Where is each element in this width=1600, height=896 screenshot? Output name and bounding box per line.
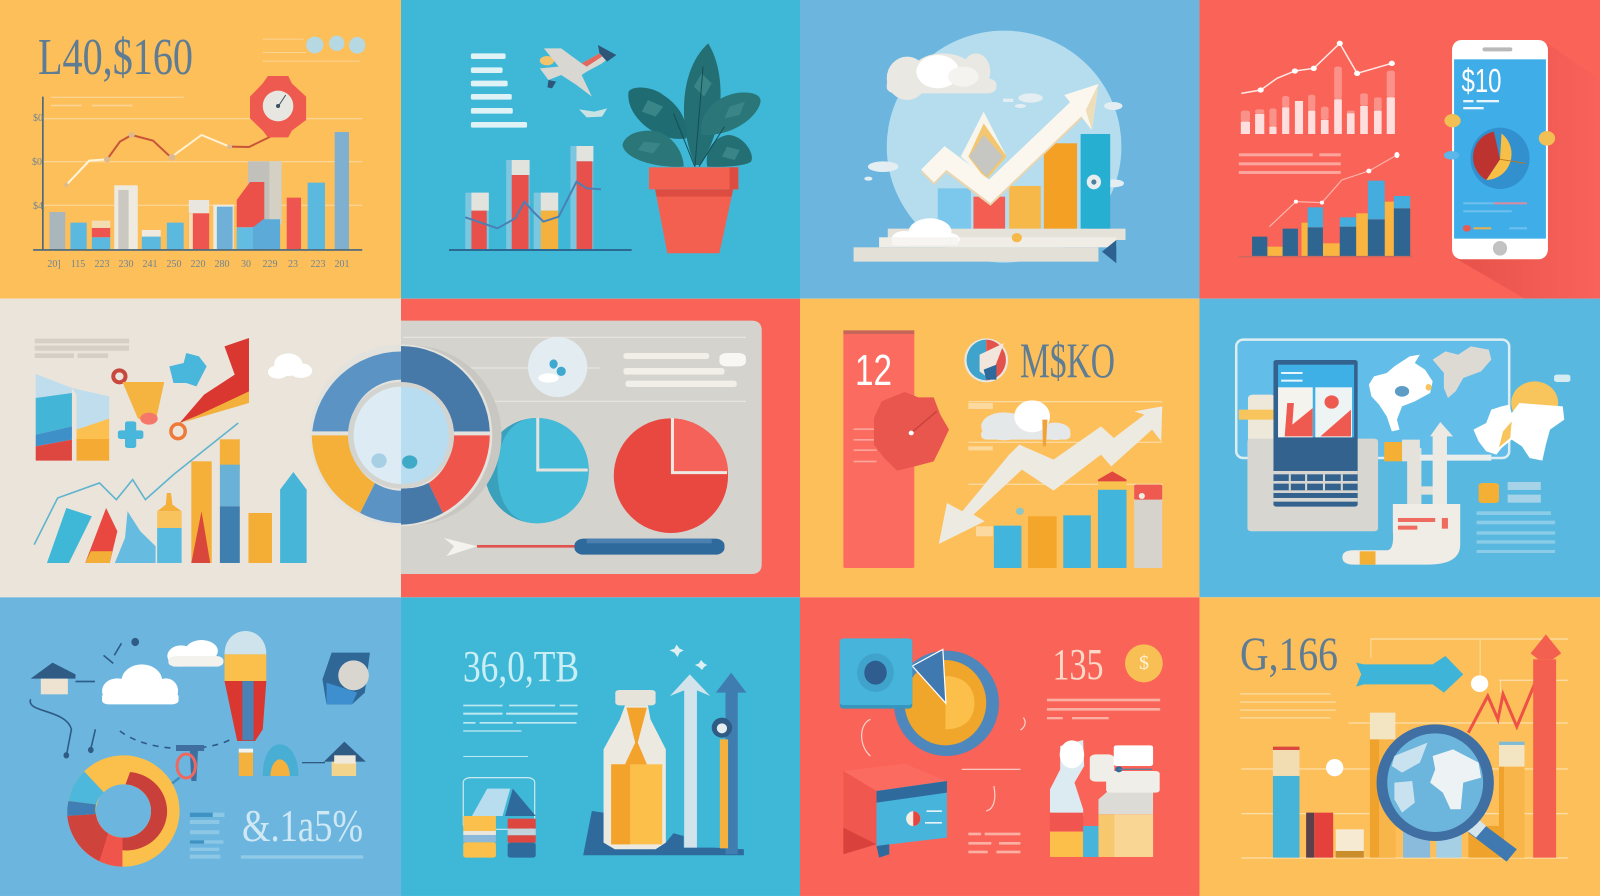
- pie chart: teal: [485, 418, 589, 523]
- white arrow: [928, 84, 1098, 194]
- heading: L40,$160: [38, 29, 193, 86]
- bottom bar chart: [1239, 152, 1412, 257]
- icon: stars: [669, 645, 707, 670]
- red arrow: [1531, 634, 1561, 858]
- text lines: [1239, 153, 1341, 174]
- line chart: [64, 132, 270, 187]
- axis labels: 220: [191, 259, 205, 270]
- axis labels: 115: [71, 259, 85, 270]
- icon: pink magnifier: [158, 745, 204, 794]
- panel: light blue icon set: [0, 597, 401, 896]
- axis labels: 250: [167, 259, 181, 270]
- panel: yellow magnifier and chart: [1199, 597, 1600, 896]
- bar chart: [49, 132, 349, 249]
- panel: blue rising arrow scene: [800, 0, 1199, 299]
- icon: 3D card: [843, 764, 947, 858]
- icon: coin: [1125, 644, 1163, 682]
- icon: small globes: [306, 36, 365, 54]
- icon: right bottle: [1090, 745, 1160, 857]
- icon: house with glasses: [302, 742, 366, 776]
- grid lines: [1241, 638, 1568, 859]
- bar chart: [1273, 713, 1524, 858]
- axis labels: 229: [263, 259, 277, 270]
- red zigzag line: [1468, 678, 1537, 733]
- pie chart: [1470, 128, 1530, 189]
- axis labels: $0: [32, 157, 42, 168]
- grid lines: [968, 401, 1162, 536]
- bar chart with line: [449, 146, 632, 250]
- axis labels: 223: [95, 259, 109, 270]
- list bars: [471, 53, 527, 128]
- axis labels: $0: [33, 113, 43, 124]
- axis labels: 230: [119, 259, 133, 270]
- legend and text lines: [1477, 375, 1570, 553]
- icon: cans in frame: [463, 778, 536, 858]
- text lines: [1240, 693, 1336, 719]
- axis labels: 30: [241, 259, 251, 270]
- icon: lens bubble: [528, 337, 587, 397]
- axis labels: 201: [335, 259, 349, 270]
- decorative marks: [862, 718, 1025, 811]
- donut chart: [310, 344, 502, 526]
- pie chart: red: [614, 418, 728, 533]
- column number: 12: [855, 346, 892, 395]
- dashboard card: [401, 321, 762, 574]
- axis labels: 241: [143, 259, 157, 270]
- phone value: $10: [1461, 62, 1501, 99]
- icon: arch: [263, 744, 298, 776]
- paper roll: [1239, 395, 1276, 441]
- icon: red stopwatch: [250, 76, 306, 137]
- text lines: [35, 339, 129, 358]
- axis labels: 280: [215, 259, 229, 270]
- icon: red swoosh arrow: [171, 338, 249, 439]
- icon: cloud: [887, 53, 996, 100]
- bar chart: [1241, 67, 1395, 134]
- nodes: [1326, 675, 1488, 776]
- panel: yellow growth chart: [800, 299, 1199, 597]
- axis labels: 23: [288, 259, 298, 270]
- phone shadow: [1456, 43, 1600, 299]
- legend bars: [190, 813, 363, 859]
- bar chart: [994, 471, 1162, 568]
- shape chart: [47, 439, 307, 563]
- icon: potted plant: [622, 43, 761, 253]
- axis labels: [32, 113, 349, 270]
- panel: teal plant and plane: [401, 0, 800, 299]
- icon: cloud: [981, 400, 1070, 446]
- bar chart: [938, 134, 1110, 229]
- trend line: [34, 423, 238, 545]
- text bars: [623, 353, 746, 387]
- white zigzag arrow: [939, 406, 1162, 544]
- axis labels: 223: [311, 259, 325, 270]
- axes: [33, 97, 362, 250]
- backdrop circle: [887, 31, 1121, 263]
- panel: yellow bar and line chart: [0, 0, 401, 299]
- arrows: [670, 673, 746, 854]
- icon: cloud: [268, 353, 312, 379]
- panel: red phone and charts: [1199, 0, 1600, 299]
- value: 135: [1052, 640, 1103, 689]
- base block: [583, 811, 744, 855]
- icon: house peak: [961, 112, 1007, 180]
- icon: teal square: [840, 638, 912, 709]
- icon: smartphone: [1444, 40, 1555, 259]
- icon: magnifier with globe: [1377, 724, 1517, 862]
- heading: M$KO: [1020, 332, 1115, 388]
- panel: red with grey dashboard: [401, 299, 800, 597]
- icon: clouds: [102, 640, 223, 704]
- sidebar column: [843, 330, 914, 568]
- panel: teal bottle and arrows: [401, 597, 800, 896]
- pie chart: [894, 649, 999, 756]
- monitor frame: [1236, 340, 1509, 458]
- icon: camera block: [322, 653, 370, 704]
- icon: round emblem: [964, 338, 1008, 382]
- stacked columns: [36, 374, 109, 461]
- platform steps: [854, 229, 1126, 263]
- blue arrow: [1356, 656, 1463, 693]
- small clouds: [864, 93, 1124, 187]
- foreground cloud: [892, 218, 960, 246]
- donut chart: [67, 755, 180, 867]
- icon: small house: [31, 663, 95, 694]
- text lines: [968, 699, 1160, 853]
- heading: G,166: [1240, 628, 1338, 681]
- icon: plane: [540, 45, 616, 117]
- icon: puzzle and plus: [118, 353, 207, 448]
- heading: 36,0,TB: [463, 642, 579, 691]
- icon: bottle: [604, 690, 666, 849]
- icon: red badge: [874, 392, 949, 471]
- pipe and arrow: [1342, 422, 1491, 565]
- text lines: [463, 705, 578, 757]
- icon: left bottle: [1050, 740, 1098, 857]
- dashes and path marks: [30, 639, 230, 758]
- axis labels: 20]: [47, 259, 61, 270]
- panel: beige charts and shapes: [0, 299, 401, 597]
- panel: blue device and world map: [1199, 299, 1600, 597]
- coin symbol: $: [1139, 652, 1149, 674]
- panel: red pie and card: [800, 597, 1199, 896]
- icon: funnel pin: [113, 370, 164, 425]
- device on box: [1247, 360, 1378, 531]
- axis labels: $4: [33, 201, 43, 212]
- line chart: [1241, 41, 1395, 93]
- icon: balloon rocket: [224, 631, 266, 776]
- world map: [1369, 346, 1564, 461]
- arrow and progress bar: [444, 538, 724, 556]
- percentage value: &.1a5%: [242, 800, 363, 851]
